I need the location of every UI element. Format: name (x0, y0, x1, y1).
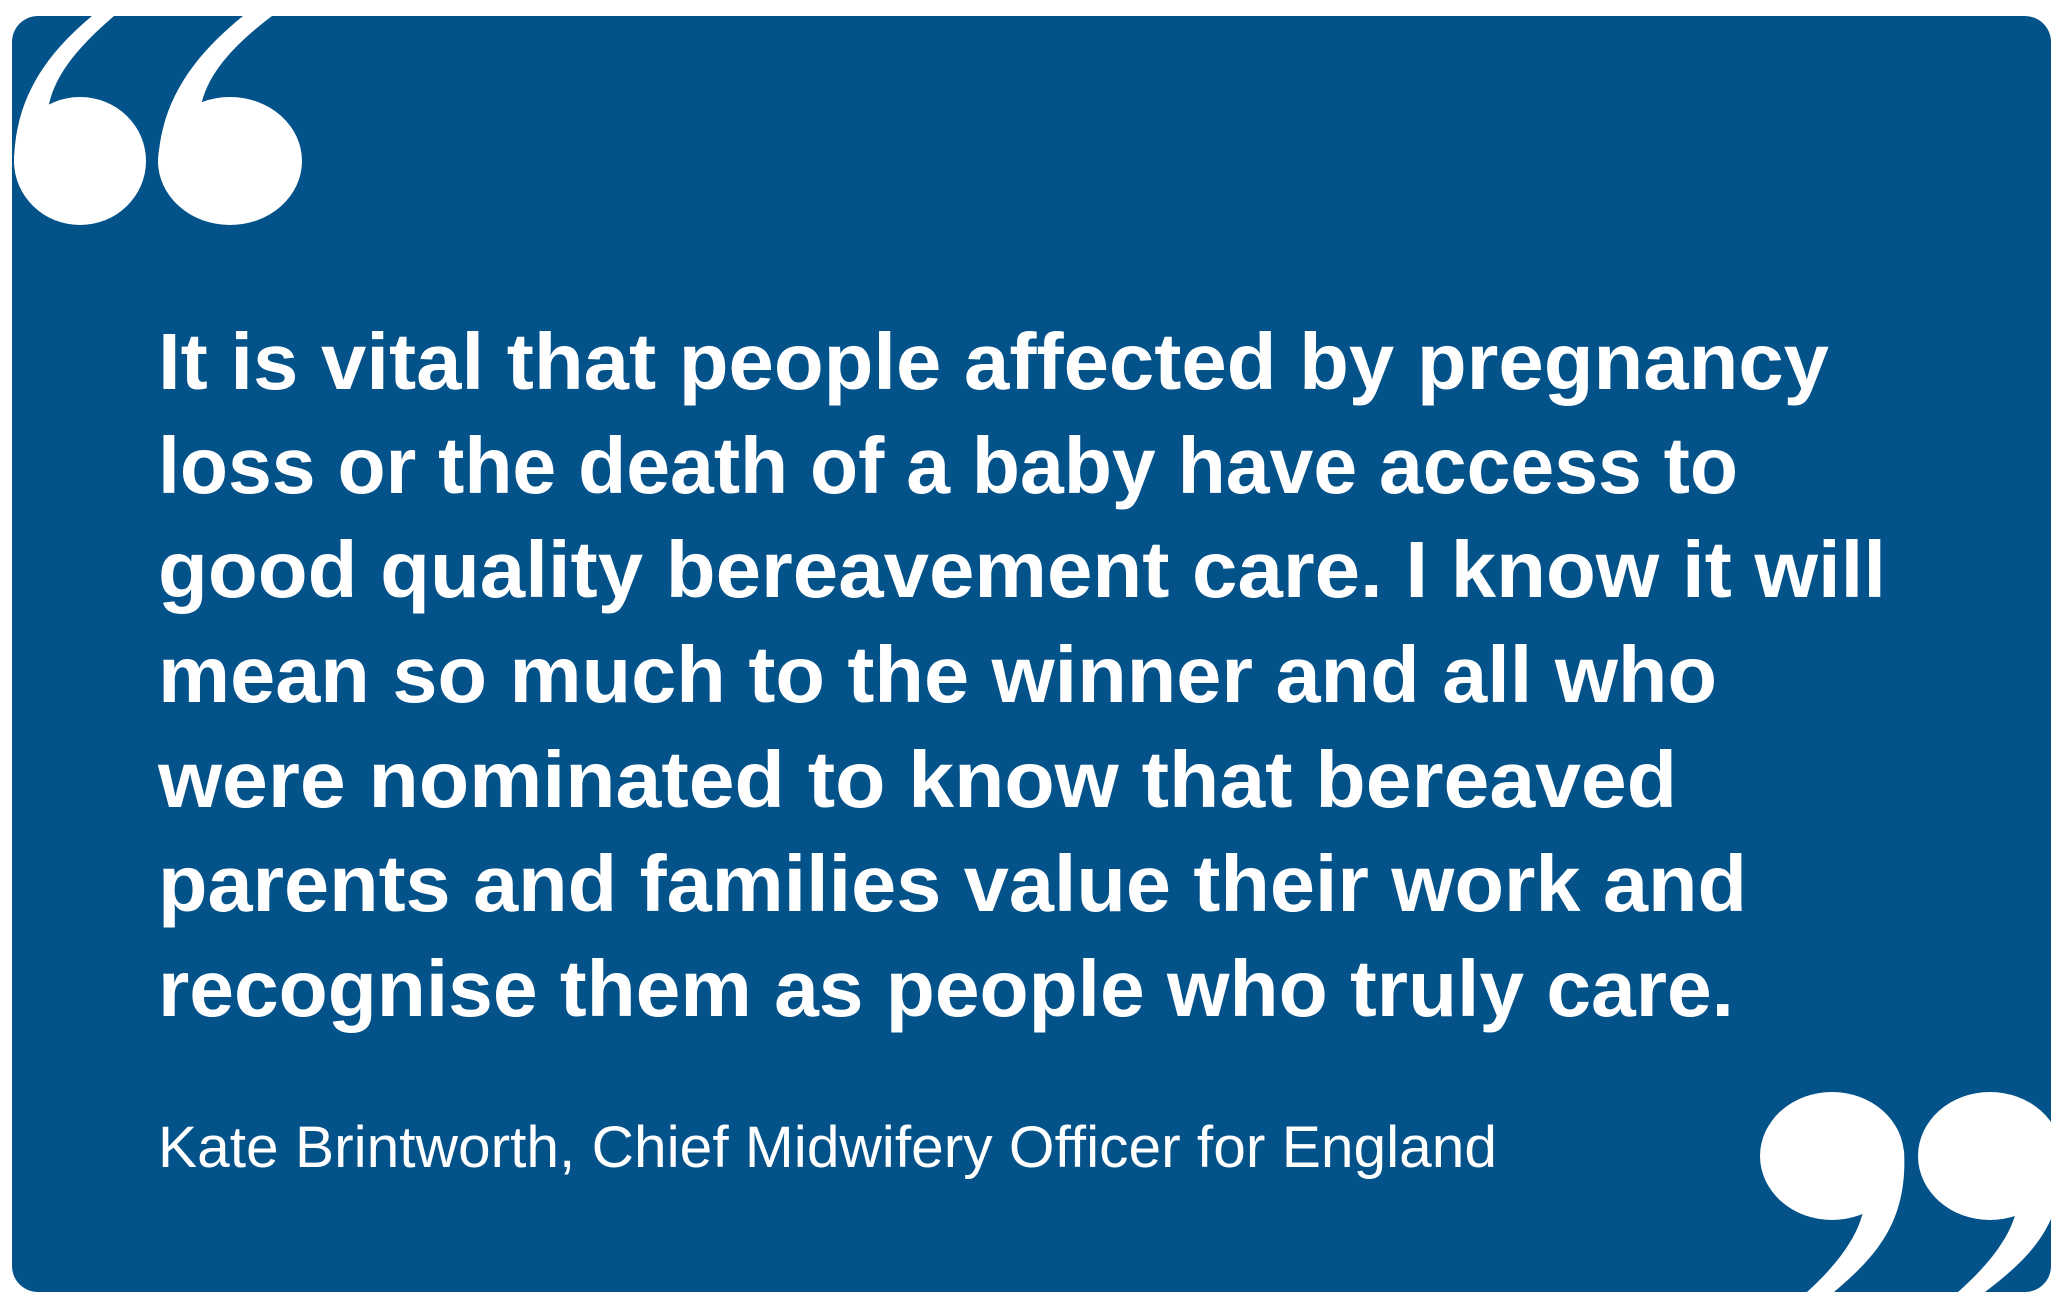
text block: quote: mean so much to the winner and all who (158, 630, 1717, 719)
text block: quote (157, 317, 1886, 1033)
icon: opening quote marks (14, 16, 302, 225)
text block: quote: recognise them as people who truly care. (158, 944, 1734, 1033)
text block: quote: parents and families value their work and (158, 839, 1747, 928)
icon: closing quote marks (1760, 1092, 2062, 1292)
text block: quote: loss or the death of a baby have access to (158, 421, 1738, 510)
text block: quote: It is vital that people affected by pregnancy (158, 317, 1830, 406)
text block: quote: were nominated to know that bereaved (157, 735, 1677, 824)
attribution: Kate Brintworth, Chief Midwifery Officer for England (158, 1115, 1497, 1180)
text block: quote: good quality bereavement care. I know it will (158, 525, 1886, 614)
